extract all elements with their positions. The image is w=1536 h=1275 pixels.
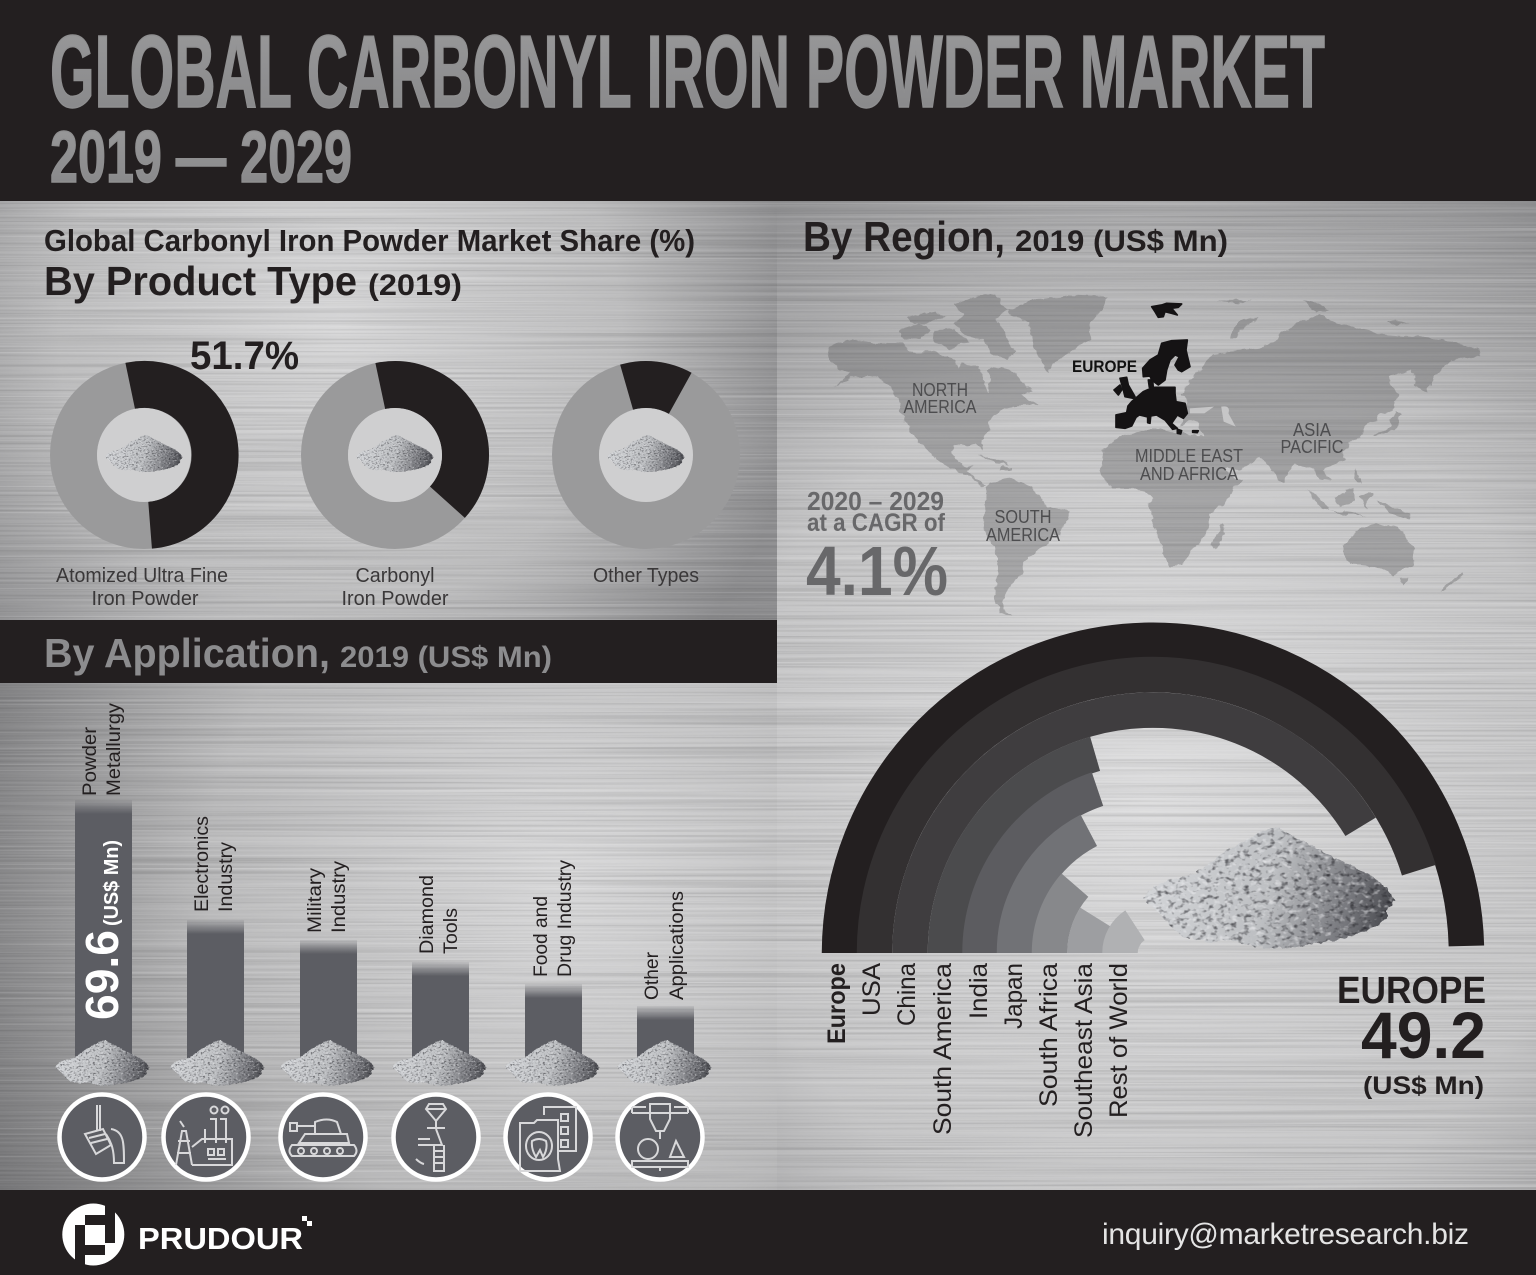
- map: inland seas: [1190, 406, 1236, 427]
- icon: diamond tool: [394, 1094, 478, 1180]
- powder piles at bar bases: [55, 1040, 712, 1086]
- logo: Prudour: PRUDOUR: [138, 1221, 303, 1256]
- bar: food and drug industry: Drug Industry: [555, 859, 576, 977]
- radial bar labels: Southeast Asia: [1070, 963, 1098, 1138]
- bar: food and drug industry: [525, 859, 582, 1060]
- radial bar labels: Europe: [823, 963, 851, 1044]
- bar chart: application: [55, 702, 712, 1086]
- callout: CAGR: at a CAGR of: [807, 509, 946, 537]
- heading band: by application: [0, 620, 777, 683]
- map labels: AMERICA: [904, 397, 976, 417]
- donut: atomized ultra fine: [74, 384, 215, 526]
- radial bar labels: India: [965, 963, 993, 1019]
- map labels: AND AFRICA: [1140, 464, 1238, 484]
- title: [50, 14, 1325, 198]
- bar: electronics industry: Electronics: [192, 816, 213, 912]
- donut: carbonyl iron powder: [324, 384, 466, 526]
- bar: food and drug industry: Food and: [531, 896, 552, 977]
- bar: powder metallurgy: 69.6: [76, 930, 128, 1020]
- bar: powder metallurgy: [75, 702, 132, 1060]
- world map: [828, 295, 1482, 615]
- header band: [0, 0, 1536, 201]
- title: 2019 — 2029: [50, 117, 352, 198]
- callout: Europe value: (US$ Mn): [1363, 1072, 1484, 1100]
- donut labels: Iron Powder: [342, 588, 449, 610]
- map labels: MIDDLE EAST: [1135, 446, 1243, 466]
- heading: by region: By Region,: [803, 213, 1005, 260]
- callout: CAGR: 2020 – 2029: [807, 486, 944, 516]
- panel: product type background: [0, 201, 777, 620]
- contact email: inquiry@marketresearch.biz: [1102, 1218, 1469, 1251]
- callout: CAGR: 4.1%: [806, 532, 948, 610]
- label: Europe on map: EUROPE: [1072, 357, 1137, 376]
- callout: Europe value: 49.2: [1361, 998, 1486, 1072]
- callout: Europe value: [1337, 970, 1486, 1100]
- value: 51.7%: 51.7%: [190, 334, 299, 378]
- radial bar labels: China: [893, 963, 921, 1026]
- bar: other applications: [637, 891, 694, 1060]
- bar: other applications: Applications: [667, 891, 688, 1000]
- map labels: NORTH: [912, 380, 968, 400]
- radial bar labels: Rest of World: [1105, 963, 1133, 1118]
- heading: by region: [803, 213, 1228, 260]
- heading band: by application: 2019 (US$ Mn): [340, 641, 552, 674]
- heading: market share: (2019): [368, 269, 462, 302]
- heading: by region: 2019 (US$ Mn): [1015, 225, 1228, 258]
- callout: CAGR: [806, 486, 948, 610]
- callout: Europe value: EUROPE: [1337, 970, 1486, 1012]
- heading: market share: By Product Type: [44, 258, 357, 304]
- donut labels: [56, 565, 699, 610]
- bar: military industry: Military: [305, 867, 326, 933]
- radial bar labels: South Africa: [1035, 963, 1063, 1107]
- heading: market share: [44, 223, 695, 304]
- heading band: by application: By Application,: [44, 630, 330, 676]
- chart: regional radial bars: [840, 640, 1466, 953]
- panel: region background: [777, 201, 1536, 1190]
- radial bar labels: Japan: [1000, 963, 1028, 1029]
- bar: electronics industry: Industry: [216, 841, 237, 912]
- logo: Prudour: [62, 1200, 312, 1268]
- map labels: AMERICA: [986, 525, 1060, 545]
- icon: 3D printer: [618, 1094, 702, 1180]
- map: land masses: [828, 295, 1482, 615]
- donut: other types: [576, 384, 716, 526]
- large powder pile: [1143, 828, 1395, 948]
- bar: military industry: Industry: [329, 860, 350, 933]
- radial bar labels: [823, 963, 1133, 1138]
- panel: market share by product type: [44, 223, 716, 610]
- icon: tank: [280, 1094, 366, 1180]
- map labels: PACIFIC: [1280, 437, 1344, 457]
- icon: tooth and pills: [506, 1094, 590, 1180]
- bar: other applications: Other: [642, 951, 663, 1000]
- donut labels: Other Types: [593, 565, 699, 587]
- icon: metal ladle: [60, 1094, 144, 1180]
- bar: diamond tools: [412, 875, 469, 1060]
- donut labels: Atomized Ultra Fine: [56, 565, 228, 587]
- footer band: [0, 1190, 1536, 1275]
- map labels: [904, 380, 1344, 545]
- bar: diamond tools: Tools: [441, 908, 462, 954]
- map labels: SOUTH: [994, 507, 1052, 527]
- bar: powder metallurgy: Powder: [80, 726, 101, 796]
- bar: powder metallurgy: Metallurgy: [104, 702, 125, 796]
- radial bar labels: South America: [929, 963, 957, 1135]
- map labels: ASIA: [1293, 420, 1331, 440]
- heading: market share: Global Carbonyl Iron Powder Market Share (%): [44, 223, 695, 258]
- bar: electronics industry: [187, 816, 244, 1060]
- bar: military industry: [300, 860, 357, 1060]
- bar: powder metallurgy: (US$ Mn): [101, 840, 123, 926]
- radial bar labels: USA: [858, 963, 886, 1016]
- bar: diamond tools: Diamond: [417, 875, 438, 954]
- donut labels: Carbonyl: [356, 565, 434, 587]
- donut labels: Iron Powder: [92, 588, 199, 610]
- icon: power plant: [164, 1094, 248, 1180]
- map: Europe highlighted: [1114, 303, 1198, 434]
- panel: application background: [0, 683, 777, 1190]
